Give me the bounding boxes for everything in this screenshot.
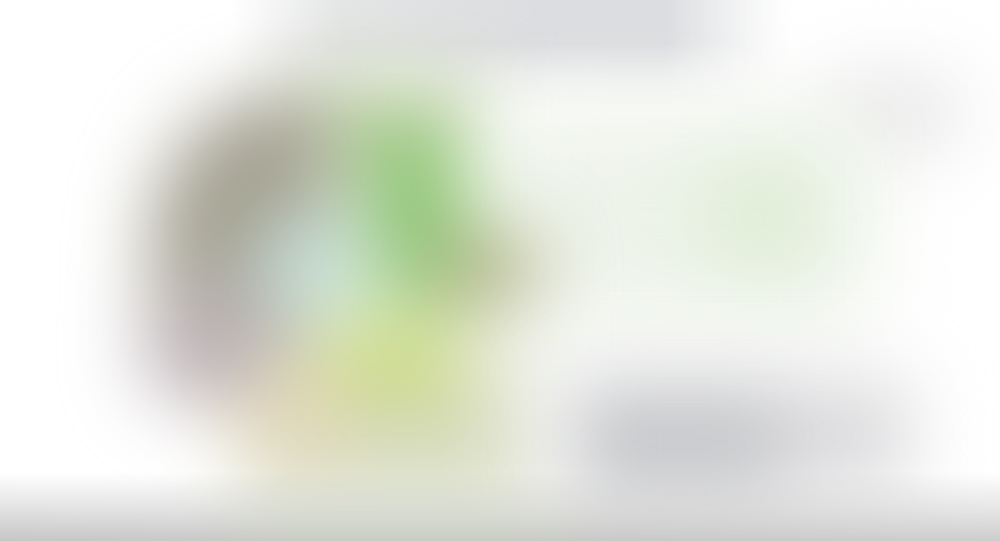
wheel diagram bbox=[140, 75, 545, 520]
panel: lower-right grey text block bbox=[570, 380, 910, 505]
wheel: pale blue centre bbox=[254, 215, 370, 315]
wheel: brown arm pointing right bbox=[445, 230, 545, 315]
wheel: peach segment bbox=[230, 370, 350, 460]
upper-right note bbox=[820, 75, 970, 151]
wheel: green segment bbox=[345, 125, 475, 300]
footer band bbox=[0, 483, 1000, 541]
wheel: top band bbox=[290, 75, 480, 135]
wheel: pale olive lower segment bbox=[345, 395, 480, 455]
wheel: pale halo bbox=[240, 340, 540, 520]
wheel: yellow-green segment bbox=[310, 305, 465, 400]
wheel: grey-brown outer ring bbox=[150, 90, 350, 390]
panel: pale green middle callout bbox=[500, 110, 870, 325]
wheel: mauve lower ring bbox=[140, 283, 280, 407]
title block bbox=[266, 0, 756, 89]
